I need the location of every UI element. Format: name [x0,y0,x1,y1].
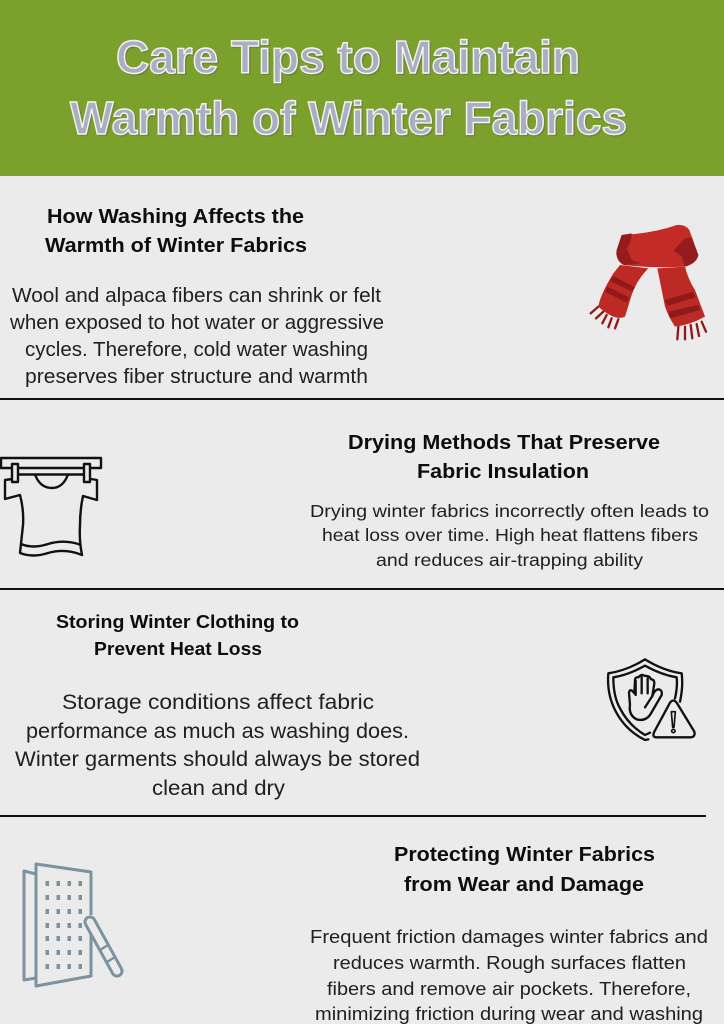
text block: protecting: fibers and remove air pockets. Therefore, [327,978,691,999]
text block: protecting: minimizing friction during wear and washing [315,1003,703,1024]
text block: drying: heat loss over time. High heat flattens fibers [322,525,698,545]
text block: storing: Winter garments should always be stored [15,748,420,771]
heading: drying: Drying Methods That Preserve [348,432,660,454]
heading: storing: Storing Winter Clothing to [56,611,299,632]
heading: protecting [394,844,655,896]
heading: washing: How Washing Affects the [47,206,304,228]
text block: storing: Storage conditions affect fabric [62,691,374,714]
text block: washing: Wool and alpaca fibers can shrink or felt [12,285,381,307]
panel: washing [9,206,706,388]
text block: washing: preserves fiber structure and warmth [25,366,368,388]
text block: drying: and reduces air-trapping ability [376,550,643,570]
text block: drying: Drying winter fabrics incorrectly often leads to [310,501,709,521]
heading: drying [348,432,660,483]
title banner [0,0,724,176]
heading: storing: Prevent Heat Loss [94,638,262,659]
text block: storing: performance as much as washing does. [26,720,409,743]
text block: washing [9,285,384,388]
icon: red scarf [591,225,706,339]
heading: storing [56,611,299,659]
panel: storing [15,611,695,800]
title banner: Warmth of Winter Fabrics [72,94,628,146]
heading: washing: Warmth of Winter Fabrics [45,235,307,257]
title banner: Care Tips to Maintain [116,31,580,83]
icon: grater and brush [24,864,117,986]
heading: protecting: Protecting Winter Fabrics [394,844,655,866]
heading: protecting: from Wear and Damage [404,874,644,896]
panel: protecting [24,844,708,1024]
icon: shield with hand and warning [608,659,695,740]
heading: drying: Fabric Insulation [417,461,589,483]
divider [0,815,706,817]
panel: drying [1,432,709,570]
text block: protecting [310,926,708,1024]
divider [0,398,724,400]
heading: washing [45,206,307,257]
text block: washing: when exposed to hot water or aggressive [9,312,384,334]
text block: drying [310,501,709,570]
icon: t-shirt on drying rail [1,458,101,556]
text block: storing [15,691,420,800]
title banner: Warmth of Winter Fabrics [70,92,627,144]
title banner: Care Tips to Maintain [118,32,582,84]
divider [0,588,724,590]
text block: storing: clean and dry [152,777,286,800]
text block: protecting: Frequent friction damages winter fabrics and [310,926,708,947]
text block: protecting: reduces warmth. Rough surfaces flatten [333,952,686,973]
text block: washing: cycles. Therefore, cold water washing [25,339,368,361]
